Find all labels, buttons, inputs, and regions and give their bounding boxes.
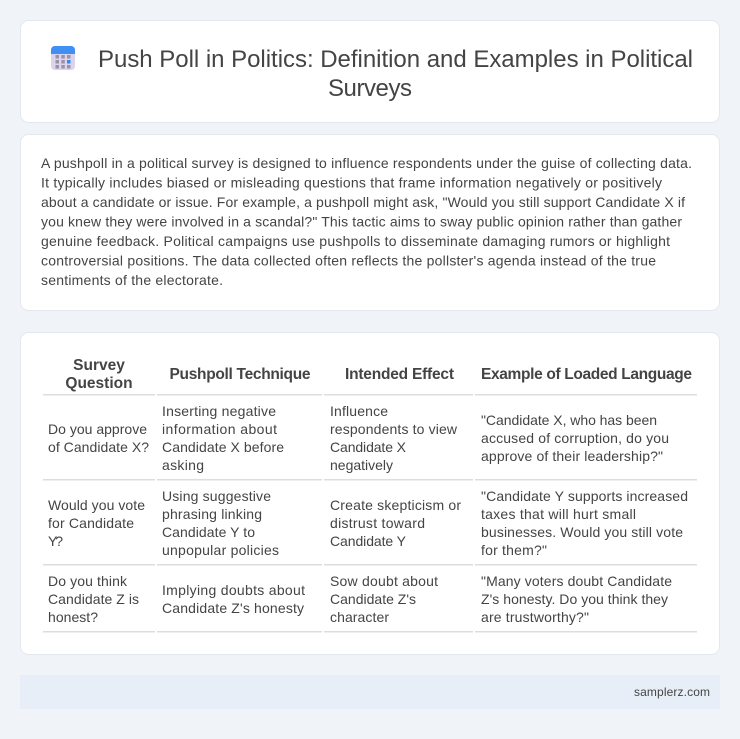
text block: description paragraph: genuine feedback. Political campaigns use pushpolls to disseminate damaging rumors or highlight	[41, 233, 670, 249]
table row 1: respondents to view	[330, 421, 458, 437]
table header: Survey	[73, 357, 125, 374]
table row 2: "Candidate Y supports increased	[481, 488, 688, 504]
table row 2: unpopular policies	[162, 542, 279, 558]
icon: calendar	[51, 46, 75, 70]
table row 1: approve of their leadership?"	[481, 448, 663, 464]
table row 2	[48, 488, 688, 558]
table row 1: Inserting negative	[162, 403, 276, 419]
table row 3: Candidate Z's honesty	[162, 600, 304, 616]
table row 2: Using suggestive	[162, 488, 271, 504]
table row 2: distrust toward	[330, 515, 425, 531]
table row 2: Candidate Y to	[162, 524, 255, 540]
table row 2: Candidate Y	[330, 533, 407, 549]
text block: description paragraph: controversial positions. The data collected often reflects the pollster's agenda instead of the true	[41, 252, 656, 268]
table row 2: for Candidate	[48, 515, 134, 531]
table header	[65, 357, 692, 392]
panel: table	[20, 332, 720, 654]
table row 3: honest?	[48, 609, 98, 625]
table row 3	[48, 573, 672, 625]
table row 1: Candidate X	[330, 439, 407, 455]
table row 1: of Candidate X?	[48, 439, 149, 455]
table grid lines	[43, 394, 697, 632]
table row 2: phrasing linking	[162, 506, 262, 522]
text block: description paragraph	[41, 155, 692, 288]
table row 1: Do you approve	[48, 421, 147, 437]
text block: description paragraph: about a candidate or issue. For example, a pushpoll might ask, "Would you still support Candidate X if	[41, 194, 685, 210]
table row 2: businesses. Would you still vote	[481, 524, 683, 540]
text block: description paragraph: A pushpoll in a political survey is designed to influence respondents under the guise of collecting data.	[41, 155, 692, 171]
table row 1: accused of corruption, do you	[481, 430, 669, 446]
title: Surveys	[328, 75, 412, 102]
table row 3: Implying doubts about	[162, 582, 305, 598]
table header: Intended Effect	[345, 366, 454, 383]
table row 3: Do you think	[48, 573, 128, 589]
table row 3: Candidate Z is	[48, 591, 139, 607]
table row 2: Create skepticism or	[330, 497, 461, 513]
table row 1: information about	[162, 421, 277, 437]
table row 3: character	[330, 609, 389, 625]
panel: description	[20, 134, 720, 310]
table row 3: Candidate Z's	[330, 591, 416, 607]
title	[98, 46, 693, 102]
table row 1	[48, 403, 669, 473]
table row 3: "Many voters doubt Candidate	[481, 573, 672, 589]
table row 2: taxes that will hurt small	[481, 506, 636, 522]
table row 2: Y?	[48, 533, 63, 549]
table row 2: Would you vote	[48, 497, 145, 513]
table header: Pushpoll Technique	[170, 366, 311, 383]
footer	[20, 675, 720, 709]
table row 3: Z's honesty. Do you think they	[481, 591, 668, 607]
table header: Question	[65, 375, 133, 392]
table row 1: asking	[162, 457, 204, 473]
text block: description paragraph: you knew they were involved in a scandal?" This tactic aims to sway public opinion rather than gather	[41, 214, 682, 230]
table row 2: for them?"	[481, 542, 547, 558]
table row 1: negatively	[330, 457, 393, 473]
title: Push Poll in Politics: Definition and Examples in Political	[98, 46, 693, 73]
table row 3: are trustworthy?"	[481, 609, 589, 625]
table row 1: "Candidate X, who has been	[481, 412, 657, 428]
table row 1: Candidate X before	[162, 439, 284, 455]
table row 1: Influence	[330, 403, 388, 419]
panel: title card	[20, 20, 720, 122]
table row 3: Sow doubt about	[330, 573, 438, 589]
text block: description paragraph: sentiments of the electorate.	[41, 272, 223, 288]
footer: samplerz.com	[634, 685, 710, 699]
table header: Example of Loaded Language	[481, 366, 692, 383]
text block: description paragraph: It typically includes biased or misleading questions that frame information negatively or positively	[41, 174, 662, 190]
